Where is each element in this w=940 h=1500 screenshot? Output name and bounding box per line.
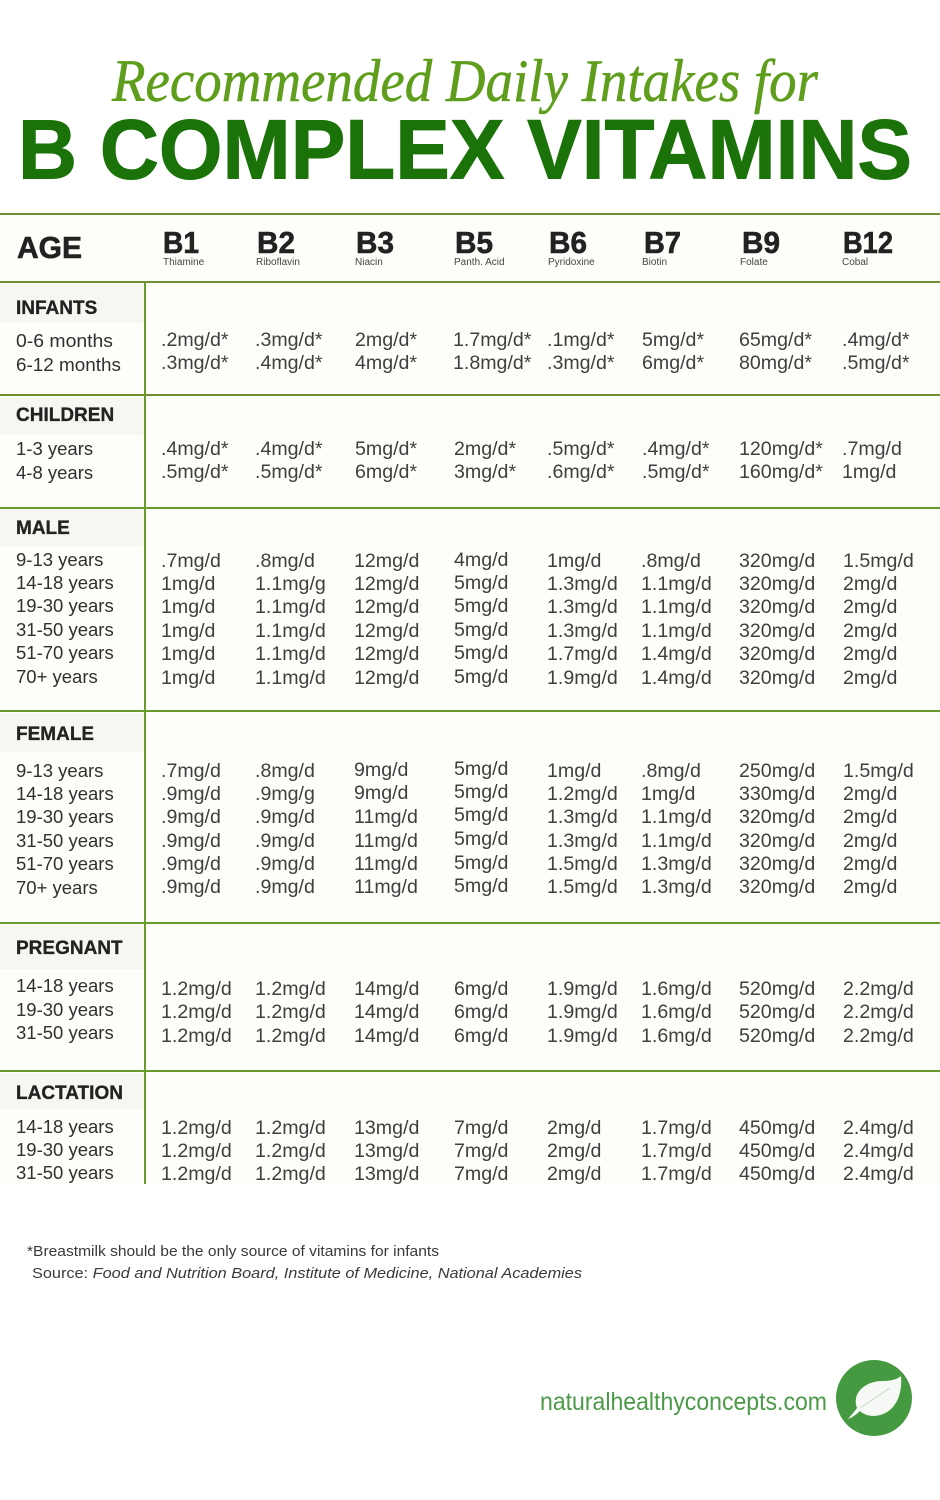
section: lactation: 19-30 years (16, 1139, 114, 1160)
section: female: 11mg/d (354, 830, 418, 852)
section: infants: 6mg/d* (642, 352, 704, 374)
section: pregnant: 14-18 years (16, 975, 114, 996)
section: female: 320mg/d (739, 876, 815, 898)
section: lactation: 1.2mg/d (255, 1140, 326, 1162)
column: B5: Panth. Acid (454, 257, 505, 268)
section: lactation: 2.4mg/d (843, 1117, 914, 1139)
section: lactation: 2mg/d (547, 1140, 601, 1162)
footnote: *Breastmilk should be the only source of vitamins for infants (27, 1243, 439, 1260)
section: lactation: 31-50 years (16, 1162, 114, 1183)
section: female: 5mg/d (454, 852, 508, 874)
section: infants: 5mg/d* (642, 329, 704, 351)
section: male: 320mg/d (739, 667, 815, 689)
section: female: 1.3mg/d (641, 853, 712, 875)
section: female: .9mg/d (255, 876, 315, 898)
section: female: 9-13 years (16, 760, 103, 781)
section: male: .8mg/d (641, 550, 701, 572)
section: children: .5mg/d* (255, 461, 323, 483)
section: children: .4mg/d* (161, 438, 229, 460)
section: female: 1.5mg/d (547, 876, 618, 898)
column: B3: B3 (356, 225, 394, 260)
section: pregnant: 1.9mg/d (547, 978, 618, 1000)
section: female: 9mg/d (354, 782, 408, 804)
section: male: 70+ years (16, 666, 98, 687)
section: children: 5mg/d* (355, 438, 417, 460)
section: male: 1.7mg/d (547, 643, 618, 665)
section: male: 14-18 years (16, 572, 114, 593)
section: male: 5mg/d (454, 572, 508, 594)
section: pregnant: 14mg/d (354, 1025, 419, 1047)
section: pregnant: 6mg/d (454, 978, 508, 1000)
column: B7: B7 (644, 225, 681, 260)
section: pregnant: 2.2mg/d (843, 978, 914, 1000)
section: male: 12mg/d (354, 620, 419, 642)
section: pregnant: 1.6mg/d (641, 1025, 712, 1047)
column: B9: Folate (740, 257, 768, 268)
section: children: 2mg/d* (454, 438, 516, 460)
column: B5 (454, 225, 505, 268)
section: female: 2mg/d (843, 806, 897, 828)
section: children: .6mg/d* (547, 461, 615, 483)
title: Recommended Daily Intakes for (111, 48, 819, 114)
section: children: .5mg/d* (642, 461, 710, 483)
section: infants: 4mg/d* (355, 352, 417, 374)
section: pregnant: 1.6mg/d (641, 1001, 712, 1023)
section: male: 1.4mg/d (641, 643, 712, 665)
section: pregnant: 31-50 years (16, 1022, 114, 1043)
section: male: 1mg/d (161, 667, 215, 689)
section: female: .9mg/d (255, 806, 315, 828)
section: male: 5mg/d (454, 642, 508, 664)
section: female: 1.3mg/d (547, 830, 618, 852)
section: children (16, 405, 902, 483)
section: female: .8mg/d (641, 760, 701, 782)
section: pregnant: 1.9mg/d (547, 1025, 618, 1047)
section: children: CHILDREN (16, 405, 114, 426)
section: female: 320mg/d (739, 806, 815, 828)
section: infants: 1.8mg/d* (453, 352, 532, 374)
section: female: 31-50 years (16, 830, 114, 851)
section: pregnant: 520mg/d (739, 1025, 815, 1047)
section: male: MALE (16, 518, 70, 539)
section: children: 120mg/d* (739, 438, 823, 460)
section: male: 5mg/d (454, 619, 508, 641)
section: male: 4mg/d (454, 549, 508, 571)
section: lactation: 450mg/d (739, 1117, 815, 1139)
section: female: 14-18 years (16, 783, 114, 804)
section: pregnant: 1.2mg/d (161, 978, 232, 1000)
section: infants: 80mg/d* (739, 352, 812, 374)
section: female: 5mg/d (454, 828, 508, 850)
section: female (16, 724, 914, 898)
section: infants: INFANTS (16, 298, 97, 319)
section: male: 1mg/d (161, 596, 215, 618)
section: lactation: 1.7mg/d (641, 1117, 712, 1139)
section: female: 1.5mg/d (547, 853, 618, 875)
section: male: 2mg/d (843, 643, 897, 665)
section: male: 320mg/d (739, 550, 815, 572)
section: infants: .3mg/d* (547, 352, 615, 374)
section: male (16, 518, 914, 689)
section: female: 2mg/d (843, 876, 897, 898)
section: lactation: 2.4mg/d (843, 1140, 914, 1162)
section: male: 320mg/d (739, 596, 815, 618)
section: female: 5mg/d (454, 781, 508, 803)
section: female: 1.1mg/d (641, 806, 712, 828)
section: male: 1.9mg/d (547, 667, 618, 689)
section: lactation: 2mg/d (547, 1117, 601, 1139)
section: pregnant: 1.2mg/d (161, 1001, 232, 1023)
section: children: .4mg/d* (642, 438, 710, 460)
title (18, 48, 912, 196)
section: female: 1mg/d (641, 783, 695, 805)
section: female: 19-30 years (16, 806, 114, 827)
section: male: 12mg/d (354, 596, 419, 618)
section: lactation: 2.4mg/d (843, 1163, 914, 1185)
section: male: 1mg/d (161, 573, 215, 595)
column: B3: Niacin (355, 257, 383, 268)
section: lactation: 1.7mg/d (641, 1140, 712, 1162)
column: B6: Pyridoxine (548, 257, 595, 268)
section: children: 160mg/d* (739, 461, 823, 483)
section: male: 1.1mg/d (641, 620, 712, 642)
section: female: 1mg/d (547, 760, 601, 782)
section: male: 12mg/d (354, 573, 419, 595)
section: male: 9-13 years (16, 549, 103, 570)
section: pregnant: 1.9mg/d (547, 1001, 618, 1023)
section: lactation: 1.2mg/d (161, 1140, 232, 1162)
section: lactation: 450mg/d (739, 1140, 815, 1162)
section: pregnant: 1.6mg/d (641, 978, 712, 1000)
section: pregnant: 520mg/d (739, 1001, 815, 1023)
section: male: 2mg/d (843, 667, 897, 689)
section: lactation (16, 1083, 914, 1185)
section: children: .4mg/d* (255, 438, 323, 460)
section: lactation: 13mg/d (354, 1117, 419, 1139)
section: children: 1mg/d (842, 461, 896, 483)
section: pregnant: 2.2mg/d (843, 1025, 914, 1047)
section: male: 1.3mg/d (547, 620, 618, 642)
section: female: 320mg/d (739, 853, 815, 875)
section: female: .9mg/d (161, 806, 221, 828)
section: female: 70+ years (16, 877, 98, 898)
section: infants: .2mg/d* (161, 329, 229, 351)
section: infants: 2mg/d* (355, 329, 417, 351)
section: infants (16, 298, 910, 375)
section: pregnant: 1.2mg/d (255, 1025, 326, 1047)
section: male: .8mg/d (255, 550, 315, 572)
section: pregnant: 2.2mg/d (843, 1001, 914, 1023)
section: male: 1.1mg/d (641, 573, 712, 595)
section: female: .9mg/d (161, 830, 221, 852)
section: male: 1.1mg/d (641, 596, 712, 618)
section: female: 1.2mg/d (547, 783, 618, 805)
section: infants: .3mg/d* (161, 352, 229, 374)
footnote (27, 1243, 583, 1282)
section: lactation: 14-18 years (16, 1116, 114, 1137)
section: pregnant: PREGNANT (16, 938, 123, 959)
table header row (17, 225, 893, 268)
column: B6 (548, 225, 595, 268)
section: pregnant: 6mg/d (454, 1025, 508, 1047)
section: female: 250mg/d (739, 760, 815, 782)
column: B12: Cobal (842, 257, 868, 268)
section: pregnant (16, 938, 914, 1047)
section: lactation: 1.2mg/d (161, 1117, 232, 1139)
section: male: 1.1mg/g (255, 573, 326, 595)
section: female: FEMALE (16, 724, 94, 745)
section: male: 1.5mg/d (843, 550, 914, 572)
section: female: 1.3mg/d (547, 806, 618, 828)
section: pregnant: 6mg/d (454, 1001, 508, 1023)
section: male: 51-70 years (16, 642, 114, 663)
section: female: 1.5mg/d (843, 760, 914, 782)
section: lactation: 1.2mg/d (255, 1117, 326, 1139)
section: lactation: 1.7mg/d (641, 1163, 712, 1185)
section: male: 1.3mg/d (547, 573, 618, 595)
section: male: 1mg/d (547, 550, 601, 572)
section: male: 12mg/d (354, 643, 419, 665)
section: male: 12mg/d (354, 667, 419, 689)
section: male: 2mg/d (843, 596, 897, 618)
section: female: 2mg/d (843, 783, 897, 805)
column: B9: B9 (742, 225, 780, 260)
section: male: 1.1mg/d (255, 667, 326, 689)
section: female: 11mg/d (354, 806, 418, 828)
section: female: 1.3mg/d (641, 876, 712, 898)
section: infants: .1mg/d* (547, 329, 615, 351)
section: female: .9mg/d (161, 783, 221, 805)
section: lactation: 2mg/d (547, 1163, 601, 1185)
section: pregnant: 1.2mg/d (255, 1001, 326, 1023)
section: lactation: 450mg/d (739, 1163, 815, 1185)
section: male: 1.1mg/d (255, 643, 326, 665)
section: lactation: LACTATION (16, 1083, 123, 1104)
section: lactation: 1.2mg/d (161, 1163, 232, 1185)
section: female: 5mg/d (454, 758, 508, 780)
section: pregnant: 14mg/d (354, 1001, 419, 1023)
title: B COMPLEX VITAMINS (18, 102, 912, 196)
section: children: 3mg/d* (454, 461, 516, 483)
section: female: 51-70 years (16, 853, 114, 874)
section: children: .5mg/d* (547, 438, 615, 460)
column: B1: B1 (163, 225, 199, 260)
column: B5: B5 (455, 225, 493, 260)
section: female: 320mg/d (739, 830, 815, 852)
column: B2: Riboflavin (256, 257, 300, 268)
section: male: 5mg/d (454, 595, 508, 617)
section: male: 320mg/d (739, 620, 815, 642)
section: male: 1.1mg/d (255, 596, 326, 618)
section: male: 1.1mg/d (255, 620, 326, 642)
footnote: Source: Food and Nutrition Board, Institute of Medicine, National Academies (32, 1265, 583, 1282)
section: male: 320mg/d (739, 573, 815, 595)
section: female: 5mg/d (454, 875, 508, 897)
column: B6: B6 (549, 225, 587, 260)
section: female: .7mg/d (161, 760, 221, 782)
section: male: .7mg/d (161, 550, 221, 572)
section: female: 9mg/d (354, 759, 408, 781)
section: infants: .4mg/d* (255, 352, 323, 374)
section: female: 1.1mg/d (641, 830, 712, 852)
section: children: .5mg/d* (161, 461, 229, 483)
table grid lines (0, 213, 940, 1184)
section: female: 5mg/d (454, 804, 508, 826)
section: lactation: 1.2mg/d (255, 1163, 326, 1185)
section: infants: 1.7mg/d* (453, 329, 532, 351)
section: lactation: 13mg/d (354, 1163, 419, 1185)
section: female: 11mg/d (354, 876, 418, 898)
section: male: 1mg/d (161, 643, 215, 665)
section label backgrounds (0, 284, 144, 1109)
website url: naturalhealthyconcepts.com (540, 1388, 827, 1416)
table header row: AGE (17, 230, 82, 265)
section: female: .9mg/d (161, 876, 221, 898)
section: male: 1.3mg/d (547, 596, 618, 618)
section: lactation: 7mg/d (454, 1117, 508, 1139)
section: male: 2mg/d (843, 620, 897, 642)
section: male: 5mg/d (454, 666, 508, 688)
section: male: 320mg/d (739, 643, 815, 665)
section: children: .7mg/d (842, 438, 902, 460)
section: female: 2mg/d (843, 830, 897, 852)
column: B12: B12 (843, 225, 893, 260)
section: infants: .4mg/d* (842, 329, 910, 351)
section: male: 1mg/d (161, 620, 215, 642)
section: infants: .3mg/d* (255, 329, 323, 351)
column: B2: B2 (257, 225, 295, 260)
section: pregnant: 19-30 years (16, 999, 114, 1020)
section: male: 1.4mg/d (641, 667, 712, 689)
section: female: 330mg/d (739, 783, 815, 805)
section: pregnant: 1.2mg/d (161, 1025, 232, 1047)
section: male: 12mg/d (354, 550, 419, 572)
section: children: 4-8 years (16, 462, 93, 483)
section: female: 11mg/d (354, 853, 418, 875)
section: male: 31-50 years (16, 619, 114, 640)
section: female: .8mg/d (255, 760, 315, 782)
section: infants: .5mg/d* (842, 352, 910, 374)
section: children: 6mg/d* (355, 461, 417, 483)
section: female: .9mg/g (255, 783, 315, 805)
section: male: 2mg/d (843, 573, 897, 595)
section: children: 1-3 years (16, 438, 93, 459)
section: male: 19-30 years (16, 595, 114, 616)
section: lactation: 7mg/d (454, 1140, 508, 1162)
section: female: 2mg/d (843, 853, 897, 875)
section: pregnant: 520mg/d (739, 978, 815, 1000)
section: female: .9mg/d (255, 830, 315, 852)
section: lactation: 7mg/d (454, 1163, 508, 1185)
section: infants: 6-12 months (16, 354, 121, 375)
column: B7: Biotin (642, 257, 667, 268)
section: lactation: 13mg/d (354, 1140, 419, 1162)
section: pregnant: 1.2mg/d (255, 978, 326, 1000)
section: infants: 0-6 months (16, 330, 113, 351)
section: pregnant: 14mg/d (354, 978, 419, 1000)
section: female: .9mg/d (161, 853, 221, 875)
section: infants: 65mg/d* (739, 329, 812, 351)
column: B1: Thiamine (163, 257, 205, 268)
section: female: .9mg/d (255, 853, 315, 875)
icon: leaf logo (836, 1360, 912, 1436)
